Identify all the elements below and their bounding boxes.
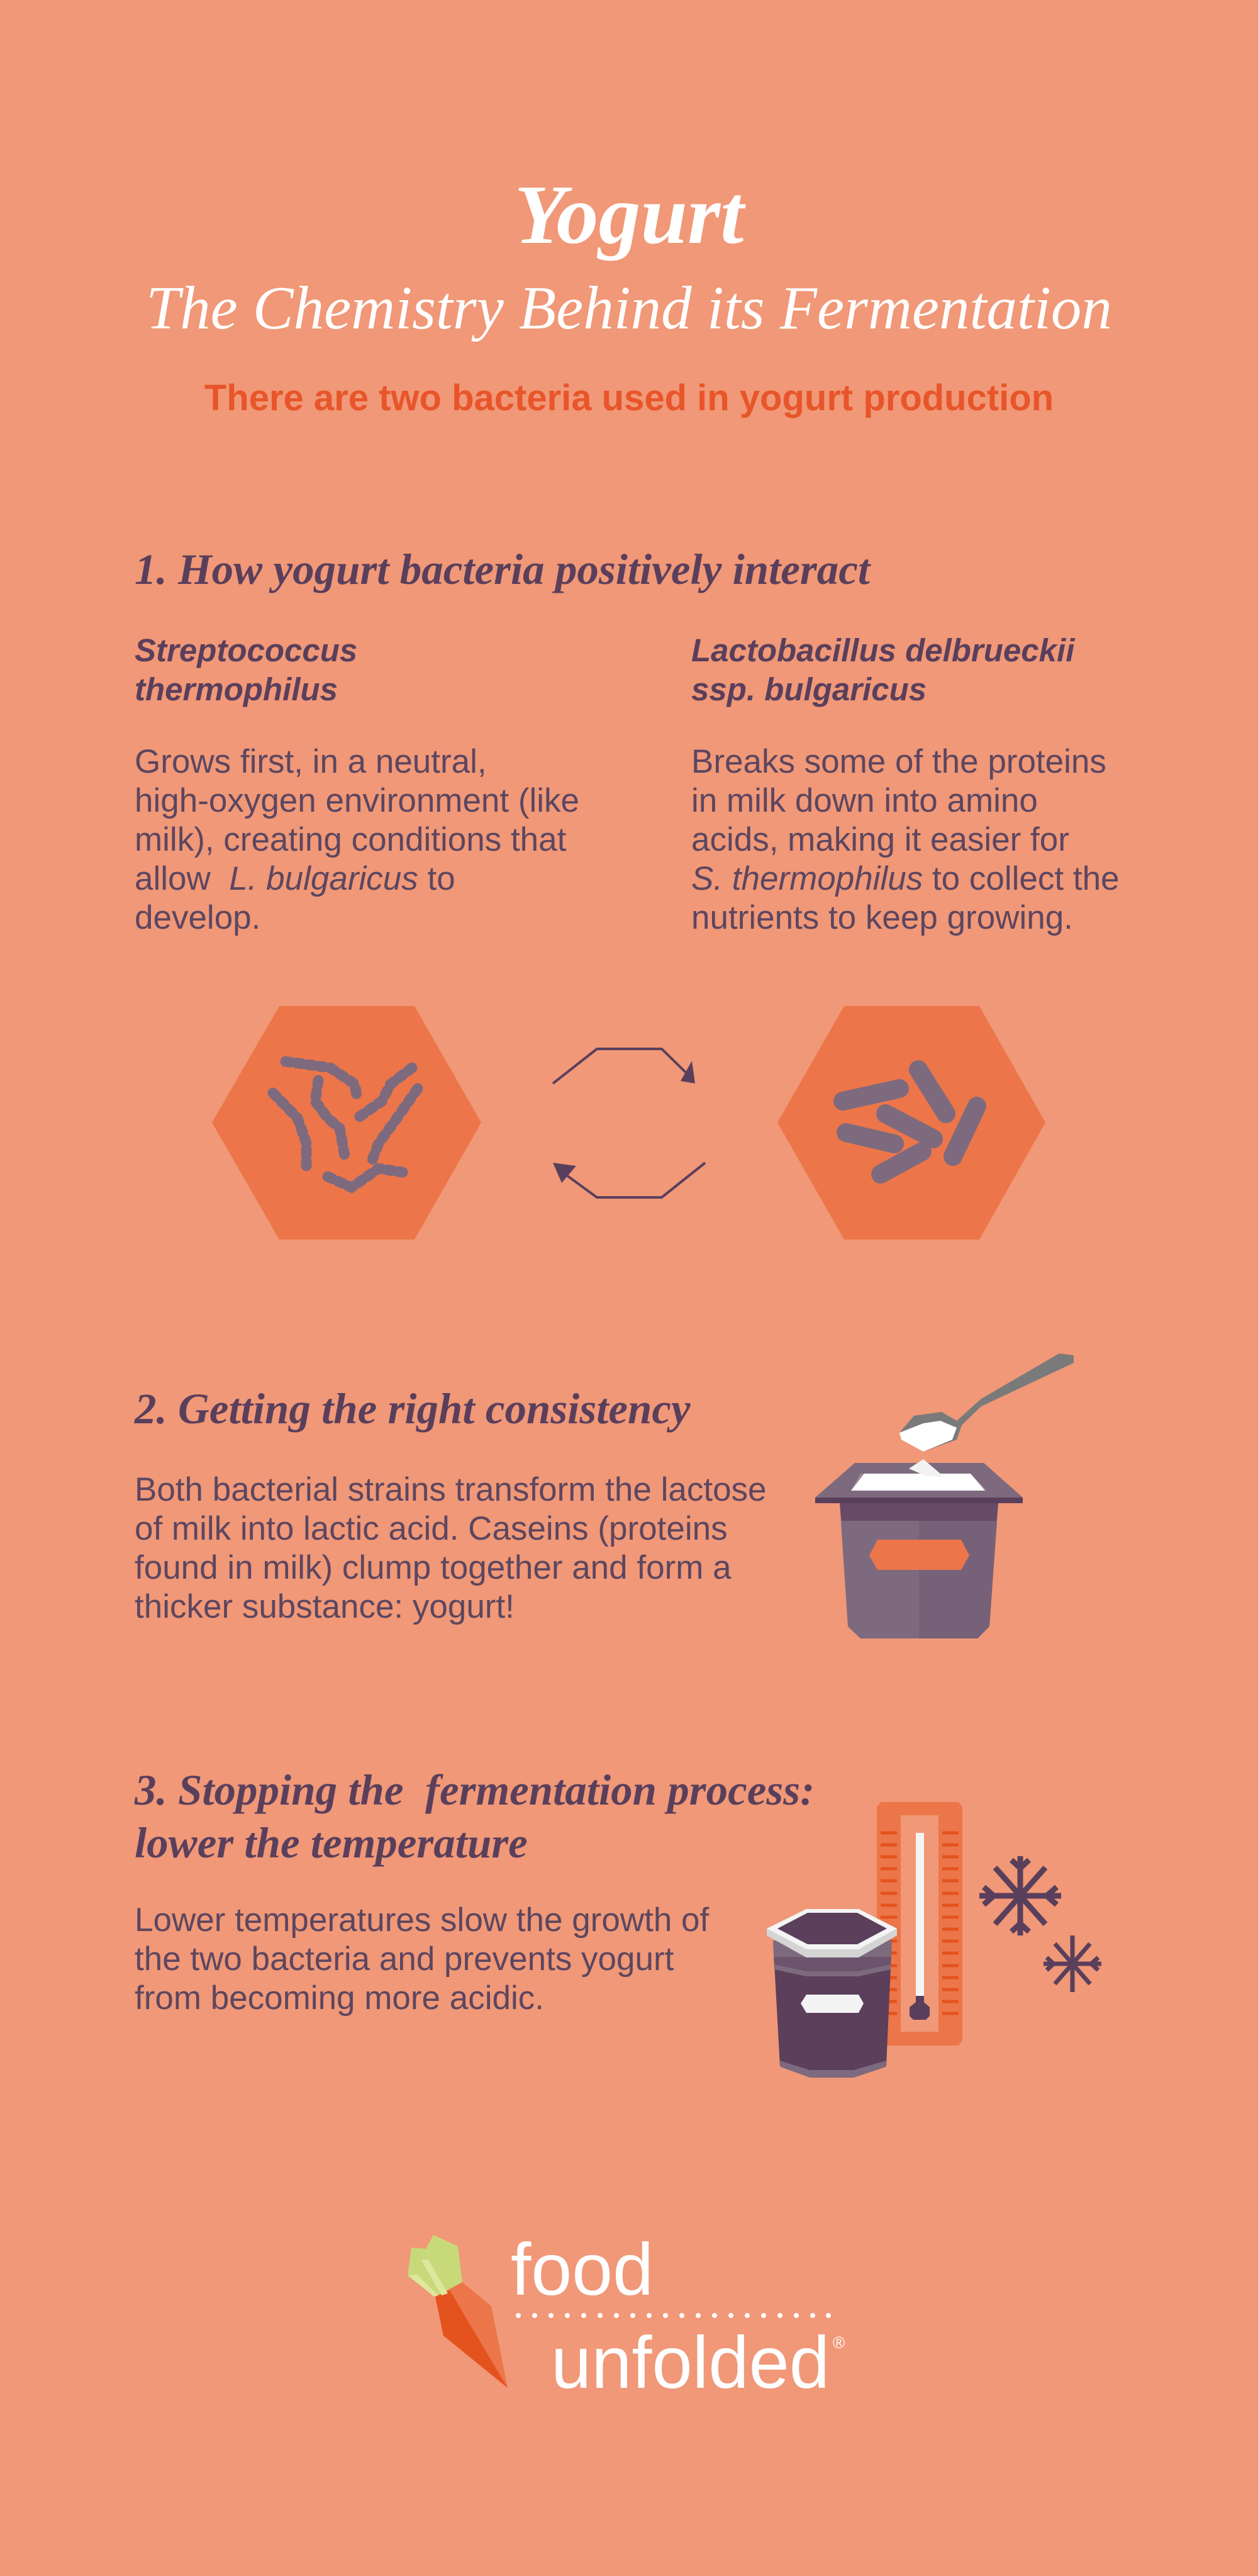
text: section 2 body: thicker substance: yogurt! [135, 1588, 515, 1625]
heading: section 3: lower the temperature [135, 1819, 528, 1867]
text: section 3 body: the two bacteria and prevents yogurt [135, 1940, 674, 1978]
heading: section 3: 3. Stopping the fermentation process: [135, 1766, 815, 1814]
intro line: There are two bacteria used in yogurt production [204, 378, 1054, 418]
text: section 2 body: of milk into lactic acid. Caseins (proteins [135, 1510, 728, 1547]
text: L. bulgaricus description: Breaks some of the proteins [691, 743, 1106, 780]
text: section 3 body [135, 1901, 710, 2017]
logo: food unfolded [408, 2228, 845, 2404]
logo: food unfolded: ® [833, 2333, 845, 2352]
species name: L. bulgaricus: ssp. bulgaricus [691, 671, 927, 707]
text: section 3 body: Lower temperatures slow the growth of [135, 1901, 709, 1939]
text: section 2 body: found in milk) clump together and form a [135, 1549, 732, 1586]
heading: section 3 [135, 1766, 815, 1867]
text: S. thermophilus description: high-oxygen environment (like [135, 782, 579, 819]
species name: L. bulgaricus [691, 632, 1076, 707]
icon: yogurt cup with spoon [815, 1353, 1074, 1638]
icon: snowflakes [979, 1856, 1101, 1992]
species name: L. bulgaricus: Lactobacillus delbrueckii [691, 632, 1074, 668]
text: L. bulgaricus description: nutrients to keep growing. [691, 899, 1073, 936]
text: section 2 body [135, 1471, 767, 1625]
text: S. thermophilus description: milk), creating conditions that [135, 821, 566, 858]
heading: section 2: 2. Getting the right consistency [135, 1385, 691, 1433]
text: S. thermophilus description: Grows first, in a neutral, [135, 743, 487, 780]
logo: food unfolded: food [511, 2228, 654, 2310]
text: L. bulgaricus description [691, 743, 1120, 936]
text: S. thermophilus description: allow L. bulgaricus to [135, 860, 455, 897]
text: section 2 body: Both bacterial strains transform the lactose [135, 1471, 767, 1508]
arrow: bottom (right to left) [553, 1163, 705, 1197]
icon: carrot [408, 2235, 508, 2388]
icon: thermometer [877, 1802, 962, 2046]
text: S. thermophilus description [135, 743, 579, 936]
subtitle: The Chemistry Behind its Fermentation [146, 274, 1112, 342]
text: section 3 body: from becoming more acidic. [135, 1980, 544, 2017]
species name: S. thermophilus: Streptococcus [135, 632, 357, 668]
title: Yogurt [515, 168, 743, 261]
species name: S. thermophilus [135, 632, 357, 707]
text: S. thermophilus description: develop. [135, 899, 260, 936]
text: L. bulgaricus description: acids, making it easier for [691, 821, 1069, 858]
icon: streptococcus hexagon [212, 1006, 481, 1240]
logo: food unfolded: unfolded [551, 2321, 830, 2404]
arrow: top (left to right) [553, 1049, 695, 1084]
text: L. bulgaricus description: S. thermophilus to collect the [691, 860, 1120, 897]
icon: lactobacillus hexagon [777, 1006, 1045, 1240]
text: L. bulgaricus description: in milk down into amino [691, 782, 1038, 819]
icon: cold yogurt cup [767, 1909, 897, 2078]
heading: section 1: 1. How yogurt bacteria positively interact [135, 546, 870, 593]
species name: S. thermophilus: thermophilus [135, 671, 338, 707]
